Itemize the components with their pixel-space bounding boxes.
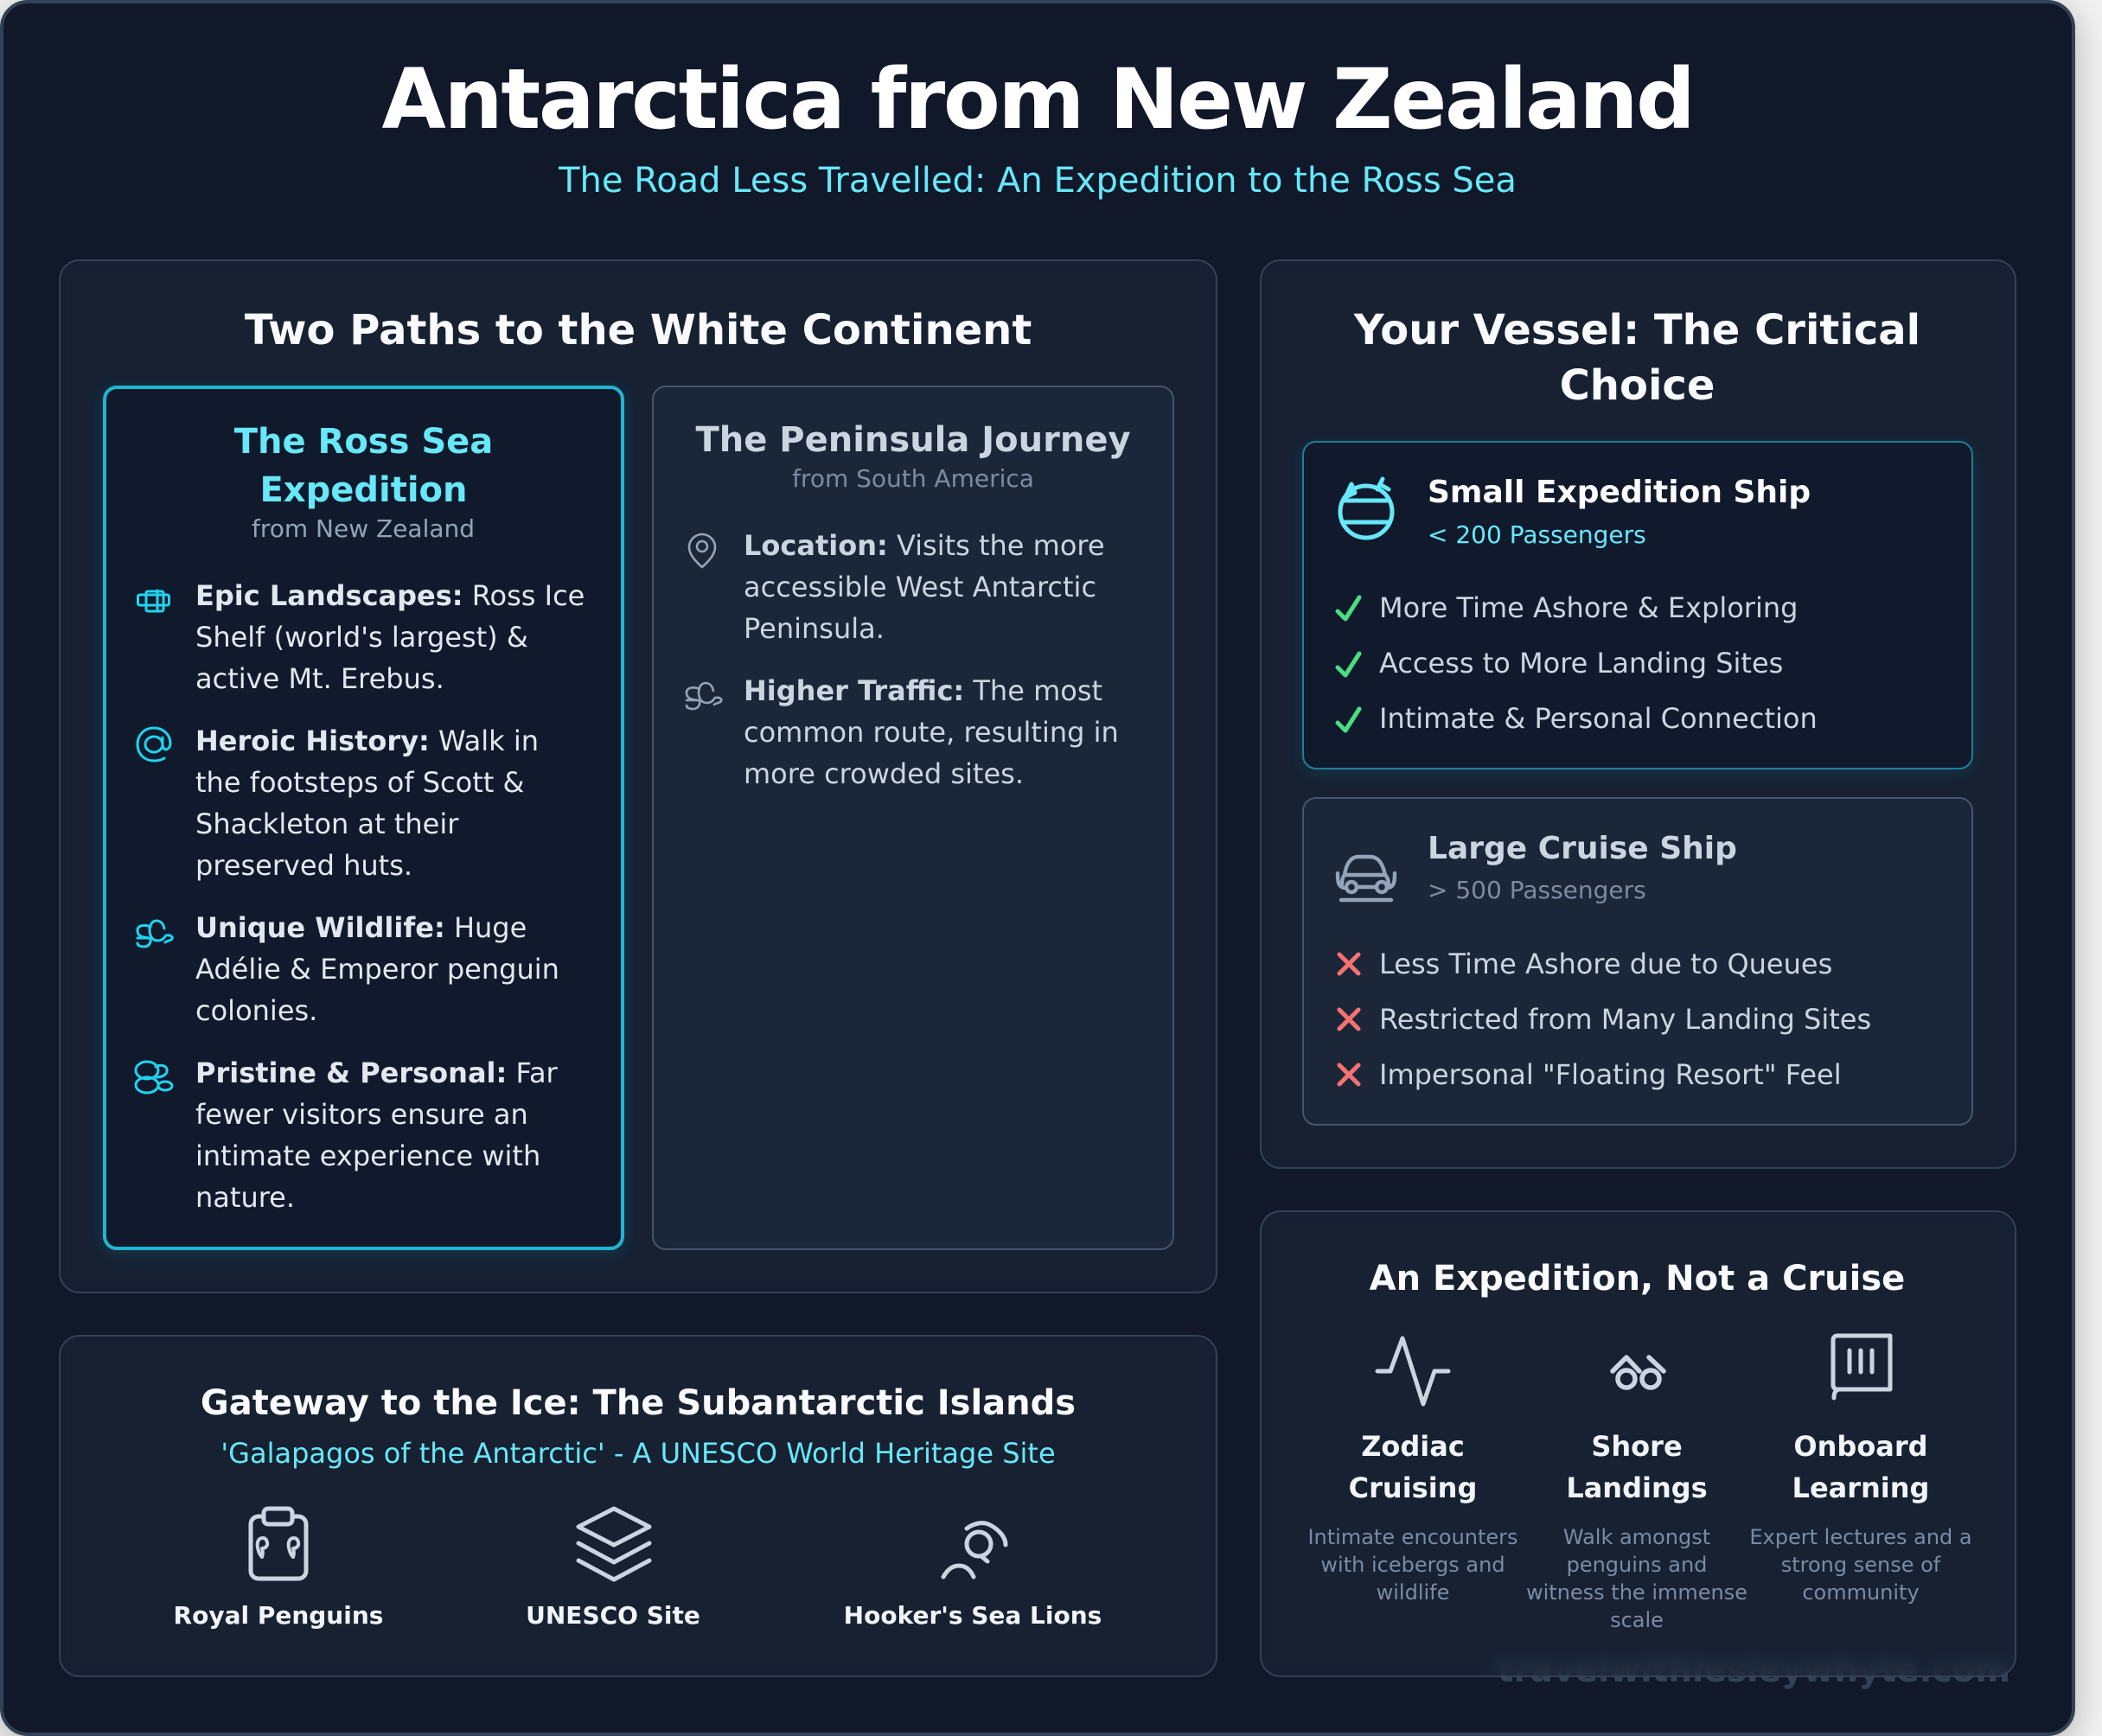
text: location: Location: Visits the more [744, 529, 1105, 562]
drawback: impersonal: Impersonal "Floating Resort" Feel [1379, 1058, 1842, 1091]
description: onboard [1749, 1525, 1972, 1605]
card title: The Peninsula Journey [695, 420, 1131, 460]
description: onboard: community [1802, 1580, 1920, 1605]
subtitle: The Road Less Travelled: An Expedition to the Ross Sea [559, 161, 1517, 201]
icon: history [137, 726, 171, 763]
text: unique wildlife [195, 911, 559, 1027]
label: royal penguins: Royal Penguins [174, 1601, 383, 1630]
text: pristine and personal [195, 1056, 558, 1214]
label: zodiac cruising: Zodiac [1361, 1430, 1465, 1463]
text: heroic history: Shackleton at their [195, 807, 458, 840]
ship capacity: > 500 Passengers [1428, 876, 1646, 904]
icon: traffic [685, 681, 723, 711]
watermark: travelwithlesleywhyte.com [1498, 1651, 2010, 1690]
icon: layers [576, 1506, 652, 1582]
card: Peninsula journey [652, 386, 1174, 1250]
ship title: Large Cruise Ship [1428, 831, 1737, 866]
text: higher traffic [744, 674, 1119, 790]
icon: small ship [1339, 477, 1394, 539]
drawback: less time: Less Time Ashore due to Queues [1379, 948, 1832, 980]
icon: wildlife [137, 920, 174, 948]
icon: lecture board [1831, 1333, 1892, 1401]
description: zodiac: wildlife [1377, 1580, 1449, 1605]
icon: penguins clipboard [249, 1506, 308, 1580]
icon: glasses [1610, 1355, 1666, 1390]
panel: subantarctic islands [59, 1335, 1217, 1677]
text: epic landscapes: active Mt. Erebus. [195, 662, 444, 695]
label: onboard learning [1792, 1430, 1929, 1504]
text: heroic history: the footsteps of Scott & [195, 766, 524, 799]
text: pristine and personal: Pristine & Personal: Far [195, 1056, 558, 1089]
card: large cruise ship [1302, 797, 1973, 1126]
text: heroic history: preserved huts. [195, 849, 412, 882]
description: shore: Walk amongst [1563, 1525, 1710, 1549]
card: Ross Sea expedition [103, 386, 624, 1250]
heading: vessel: Your Vessel: The Critical [1354, 306, 1920, 354]
description: onboard: strong sense of [1781, 1553, 1940, 1577]
card title [233, 422, 493, 510]
benefit: intimate connection: Intimate & Personal Connection [1379, 702, 1818, 735]
description: zodiac: with icebergs and [1320, 1553, 1505, 1577]
text: unique wildlife: Adélie & Emperor penguin [195, 953, 559, 986]
drawback: restricted: Restricted from Many Landing Sites [1379, 1003, 1871, 1036]
description: shore: scale [1610, 1608, 1664, 1632]
label: Hooker's sea lions: Hooker's Sea Lions [844, 1601, 1102, 1630]
text: location [744, 529, 1105, 645]
card: small expedition ship [1302, 441, 1973, 769]
ship title: Small Expedition Ship [1428, 475, 1811, 510]
icon: location pin [688, 533, 716, 569]
heading: vessel [1354, 306, 1920, 410]
text: location: accessible West Antarctic [744, 571, 1096, 603]
panel: expedition not a cruise [1260, 1210, 2016, 1677]
panel: your vessel [1260, 259, 2016, 1169]
text: epic landscapes: Epic Landscapes: Ross Ice [195, 579, 585, 612]
ship capacity: < 200 Passengers [1428, 520, 1646, 549]
label: onboard learning: Learning [1792, 1471, 1929, 1504]
text: pristine and personal: nature. [195, 1181, 295, 1214]
card title: Expedition [259, 470, 468, 510]
text: heroic history [195, 724, 539, 882]
label: shore landings: Shore [1591, 1430, 1683, 1463]
text: unique wildlife: Unique Wildlife: Huge [195, 911, 527, 944]
text: epic landscapes: Shelf (world's largest) & [195, 621, 528, 654]
heading: vessel: Choice [1560, 361, 1715, 410]
icon: pristine [135, 1060, 173, 1095]
label: UNESCO site: UNESCO Site [526, 1601, 700, 1630]
text: pristine and personal: intimate experience with [195, 1139, 540, 1172]
label: zodiac cruising [1349, 1430, 1477, 1504]
panel: two paths [59, 259, 1217, 1293]
description: shore: penguins and [1567, 1553, 1707, 1577]
heading: gateway: Gateway to the Ice: The Subantarctic Islands [201, 1383, 1076, 1423]
subheading: UNESCO: 'Galapagos of the Antarctic' - A UNESCO World Heritage Site [220, 1437, 1056, 1470]
text: higher traffic: common route, resulting in [744, 716, 1119, 749]
card subtitle: from New Zealand [252, 514, 475, 543]
label: shore landings [1566, 1430, 1708, 1504]
label: zodiac cruising: Cruising [1349, 1471, 1477, 1504]
text: epic landscapes [195, 579, 585, 695]
heading: expedition: An Expedition, Not a Cruise [1370, 1259, 1905, 1299]
icon: large ship [1335, 854, 1397, 903]
text: unique wildlife: colonies. [195, 994, 317, 1027]
benefit: more time ashore: More Time Ashore & Exploring [1379, 591, 1798, 624]
icon: zodiac pulse [1375, 1337, 1451, 1406]
text: heroic history: Heroic History: Walk in [195, 724, 539, 757]
card subtitle: from South America [792, 464, 1034, 493]
text: higher traffic: more crowded sites. [744, 757, 1024, 790]
heading: two paths: Two Paths to the White Continent [245, 306, 1032, 354]
description: zodiac [1307, 1525, 1518, 1605]
label: onboard learning: Onboard [1793, 1430, 1928, 1463]
description: zodiac: Intimate encounters [1307, 1525, 1518, 1549]
text: location: Peninsula. [744, 612, 885, 645]
description: onboard: Expert lectures and a [1749, 1525, 1972, 1549]
label: shore landings: Landings [1566, 1471, 1708, 1504]
description: shore: witness the immense [1526, 1580, 1747, 1605]
description: shore [1526, 1525, 1747, 1632]
card title: The Ross Sea [234, 422, 493, 462]
text: higher traffic: Higher Traffic: The most [744, 674, 1102, 707]
text: pristine and personal: fewer visitors ensure an [195, 1098, 528, 1131]
benefit: landing sites: Access to More Landing Sites [1379, 647, 1783, 680]
icon: sea lion [941, 1521, 1008, 1579]
title: Antarctica from New Zealand [382, 51, 1693, 148]
icon: landscapes [137, 590, 170, 612]
